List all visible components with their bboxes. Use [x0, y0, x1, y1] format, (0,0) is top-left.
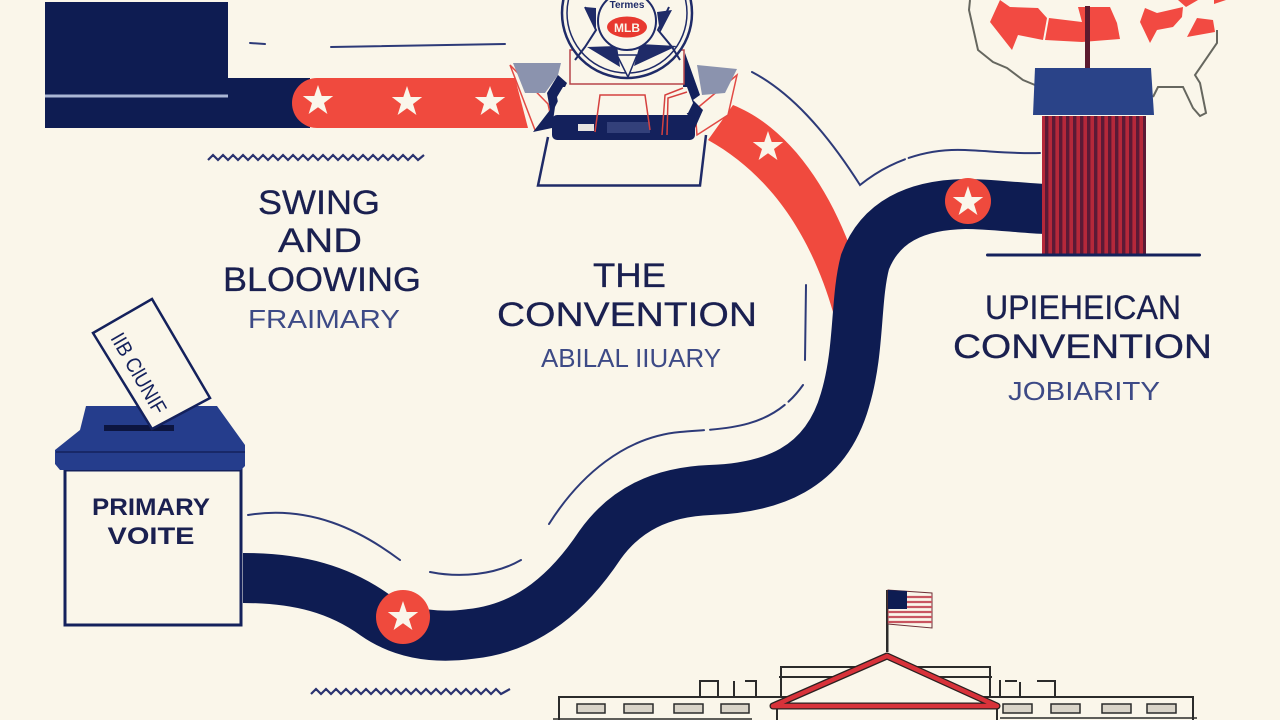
- heading: swing and blooming: [208, 155, 424, 334]
- chimneys: [700, 680, 1055, 697]
- icon: ballot box: [55, 299, 245, 625]
- primary vote label: [92, 494, 210, 550]
- map states: [990, 0, 1120, 50]
- seal: [562, 0, 692, 78]
- icon: convention seal and stand: [510, 0, 737, 186]
- flap left: [513, 63, 561, 93]
- primary vote label: VOITE: [108, 523, 194, 550]
- windows: [577, 704, 1176, 713]
- top-left navy banner: [45, 2, 310, 128]
- heading: the convention: CONVENTION: [497, 296, 757, 334]
- icon: podium and US map: [969, 0, 1226, 256]
- upper storey: [779, 667, 992, 697]
- heading: swing and blooming: AND: [278, 222, 362, 260]
- heading: republican convention: JOBIARITY: [1008, 376, 1160, 406]
- ballot box lid: [55, 406, 245, 470]
- ballot text: IIB ClUNIF: [106, 329, 171, 418]
- icon: white house with flag: [553, 590, 1197, 720]
- primary vote label: PRIMARY: [92, 494, 210, 521]
- heading: swing and blooming: SWING: [258, 184, 380, 222]
- stand body: [557, 87, 693, 113]
- heading: republican convention: UPIEHEICAN: [985, 289, 1181, 327]
- podium pole: [1085, 6, 1090, 68]
- route star markers: [376, 178, 991, 644]
- map outline: [969, 0, 1217, 116]
- main navy route: [243, 204, 1046, 636]
- ballot paper: [93, 299, 210, 429]
- podium base line: [986, 254, 1201, 256]
- heading: republican convention: CONVENTION: [953, 328, 1212, 366]
- hand shapes with red outline: [510, 65, 737, 135]
- red ribbon with stars: [292, 78, 528, 128]
- heading: republican convention: [953, 289, 1212, 406]
- heading: the convention: [497, 257, 757, 373]
- podium body: [1042, 116, 1146, 255]
- wings: [559, 697, 1193, 720]
- bottom zigzag decoration: [311, 689, 510, 694]
- heading: swing and blooming: FRAIMARY: [248, 304, 400, 334]
- seal text: Termes: [610, 0, 645, 11]
- portico: [777, 708, 997, 720]
- heading: swing and blooming: BLOOWING: [223, 261, 421, 299]
- stand box: [538, 135, 706, 186]
- flap right: [697, 65, 737, 95]
- podium top: [1033, 68, 1154, 115]
- flag pole: [886, 590, 888, 652]
- ballot box body: [65, 470, 241, 625]
- icon: convention seal and stand: MLB: [614, 21, 640, 35]
- thin dashed route lines: [248, 43, 1040, 575]
- seal frame: [570, 50, 684, 84]
- red curved ribbon to main route: [708, 105, 853, 312]
- red pediment: [773, 656, 997, 706]
- flag: [888, 590, 932, 628]
- heading: the convention: ABILAL IIUARY: [541, 343, 721, 373]
- heading: the convention: THE: [593, 257, 666, 295]
